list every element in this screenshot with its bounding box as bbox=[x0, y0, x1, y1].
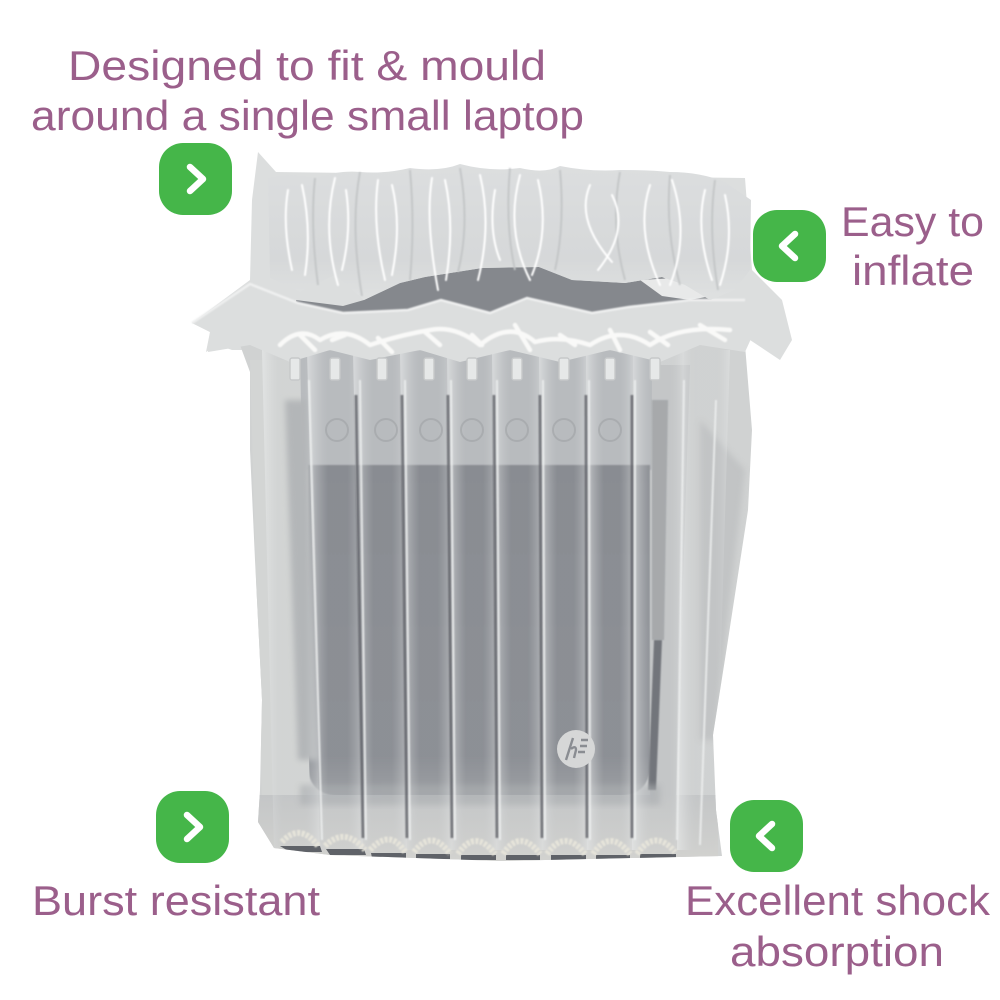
left side film bbox=[256, 380, 310, 778]
column seam highlights bbox=[309, 380, 716, 845]
bottom dark base strips bbox=[280, 846, 676, 860]
lower fade bbox=[258, 795, 718, 865]
label: easy to inflate bbox=[841, 198, 984, 294]
icon: green arrow left, bottom right bbox=[730, 800, 803, 872]
valve tabs and ruffled rim bbox=[192, 284, 755, 380]
label: excellent shock absorption: absorption bbox=[730, 928, 944, 975]
heading: fit and mould: around a single small laptop bbox=[31, 92, 584, 139]
column seams bbox=[356, 395, 632, 838]
heading: fit and mould: Designed to fit & mould bbox=[68, 42, 546, 89]
label: excellent shock absorption: Excellent shock bbox=[685, 877, 991, 924]
air columns bbox=[262, 350, 730, 850]
bottom crimped scallops bbox=[282, 833, 675, 854]
rear flap of bag bbox=[192, 152, 792, 360]
laptop top edge visible in the opening bbox=[296, 267, 712, 325]
inflated top pillow bbox=[268, 164, 751, 300]
bag body bbox=[230, 340, 760, 870]
label: easy to inflate: Easy to bbox=[841, 198, 984, 245]
label: excellent shock absorption bbox=[685, 877, 991, 975]
heading: fit and mould bbox=[31, 42, 584, 139]
icon: green arrow right, top left bbox=[159, 143, 232, 215]
logo on laptop bbox=[557, 730, 595, 768]
label: easy to inflate: inflate bbox=[852, 247, 974, 294]
icon: green arrow right, bottom left bbox=[156, 791, 229, 863]
laptop upper section seen through film bbox=[300, 350, 655, 470]
laptop lower section seen through film bbox=[308, 465, 650, 796]
label: burst resistant: Burst resistant bbox=[32, 877, 320, 924]
icon: green arrow left, top right bbox=[753, 210, 826, 282]
product: air column bag with laptop bbox=[192, 152, 792, 870]
valve circles bbox=[326, 419, 621, 441]
right side film with laptop hinge bbox=[650, 365, 690, 800]
